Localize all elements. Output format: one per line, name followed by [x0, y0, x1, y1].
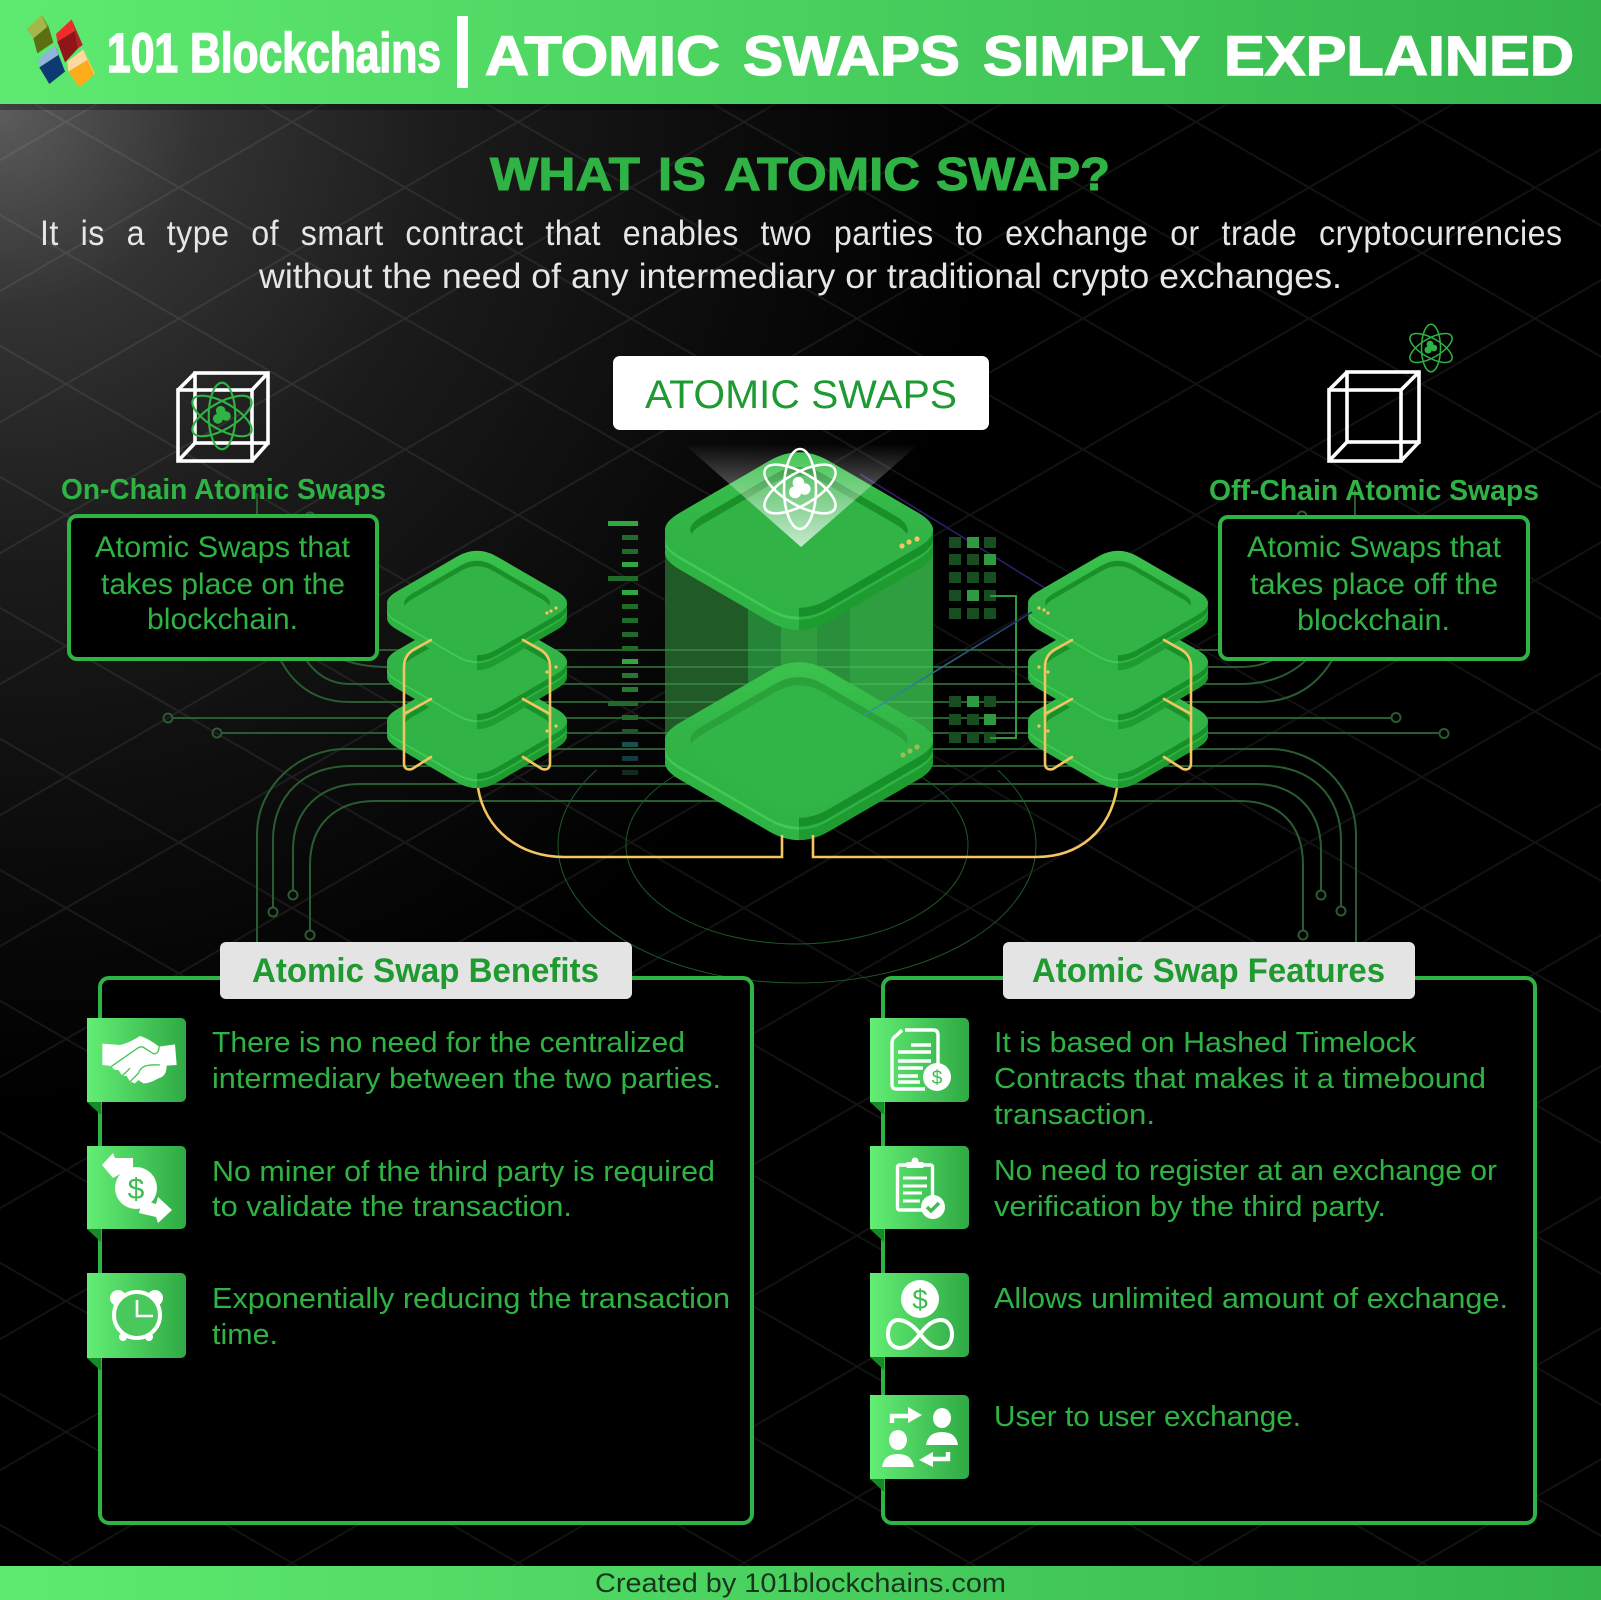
description second line: without the need of any intermediary or traditional crypto exchanges. [258, 257, 1342, 296]
icon: empty cube with atom outside [1329, 324, 1456, 461]
circuit lines [164, 490, 1448, 945]
feature text 1: transaction. [994, 1099, 1155, 1131]
icon: contract document tile: $ [932, 1068, 943, 1089]
purple accent line [860, 474, 1045, 588]
icon: atom over central server [757, 449, 843, 529]
feature text 2 [994, 1155, 1497, 1223]
icon: alarm clock tile [87, 1273, 186, 1371]
central server [665, 452, 933, 840]
light beam [684, 444, 919, 547]
feature text 4: User to user exchange. [994, 1401, 1301, 1433]
title: SIMPLY [983, 24, 1200, 87]
heading: what is atomic swap: ATOMIC [724, 148, 920, 200]
feature text 3: Allows unlimited amount of exchange. [994, 1283, 1508, 1315]
panel: off-chain description: takes place off the [1250, 568, 1498, 601]
heading pill: benefits [220, 942, 632, 999]
label box: atomic swaps: ATOMIC SWAPS [645, 373, 957, 417]
title: EXPLAINED [1224, 24, 1574, 87]
title: ATOMIC [485, 24, 720, 87]
benefit text 3: time. [212, 1319, 278, 1351]
header banner [0, 0, 1601, 104]
title: SWAPS [743, 24, 960, 87]
heading: what is atomic swap: SWAP? [936, 148, 1110, 200]
benefit text 3: Exponentially reducing the transaction [212, 1283, 730, 1315]
icon: handshake tile [87, 1018, 186, 1115]
translucent column between server slabs [665, 548, 933, 763]
panel: atomic swap features [870, 942, 1535, 1523]
feature text 1 [994, 1027, 1486, 1131]
yellow connectors to central server [478, 788, 1117, 857]
concentric ellipses [558, 770, 1036, 984]
panel: off-chain description: blockchain. [1297, 604, 1450, 637]
panel: off-chain description: Atomic Swaps that [1247, 531, 1502, 564]
benefit text 2: to validate the transaction. [212, 1191, 572, 1223]
description first line: It is a type of smart contract that enables two parties to exchange or trade cryptocurrencies [40, 214, 1563, 253]
feature text 1: It is based on Hashed Timelock [994, 1027, 1417, 1059]
icon: dollar arrows tile [87, 1146, 186, 1242]
blue accent line [864, 612, 1032, 715]
left server stack [387, 551, 567, 788]
benefit text 1: There is no need for the centralized [212, 1027, 685, 1059]
icon: user to user tile [870, 1395, 969, 1492]
panel: on-chain description: Atomic Swaps that [95, 531, 351, 564]
benefit text 1: intermediary between the two parties. [212, 1063, 721, 1095]
off-chain label: Off-Chain Atomic Swaps [1209, 475, 1539, 507]
panel: on-chain description: blockchain. [147, 603, 298, 636]
title [485, 24, 1574, 87]
footer: Created by 101blockchains.com [595, 1568, 1006, 1598]
right server stack [1028, 551, 1208, 788]
icon: cube with atom inside [178, 373, 268, 461]
feature text 2: verification by the third party. [994, 1191, 1386, 1223]
panel: on-chain description [69, 516, 377, 659]
benefit text 2 [212, 1156, 715, 1223]
icon: clipboard check tile [870, 1146, 969, 1242]
panel: atomic swap benefits [87, 942, 752, 1523]
feature text 1: Contracts that makes it a timebound [994, 1063, 1486, 1095]
heading pill: benefits: Atomic Swap Benefits [252, 952, 599, 990]
logo wordmark: 101 Blockchains [107, 21, 441, 84]
panel: on-chain description: takes place on the [101, 568, 345, 601]
label box: atomic swaps [613, 356, 989, 430]
icon: dollar infinity tile [870, 1273, 969, 1370]
heading: what is atomic swap: IS [658, 148, 706, 200]
benefit text 2: No miner of the third party is required [212, 1156, 715, 1188]
benefit text 1 [212, 1027, 721, 1095]
benefit text 3 [212, 1283, 730, 1351]
on-chain label: On-Chain Atomic Swaps [61, 474, 386, 506]
ladder bars [608, 521, 638, 775]
heading pill: features [1003, 942, 1415, 999]
icon: contract document tile [870, 1018, 969, 1115]
heading: what is atomic swap: WHAT [490, 148, 640, 200]
pixel squares [949, 537, 1016, 743]
feature text 2: No need to register at an exchange or [994, 1155, 1497, 1187]
heading: what is atomic swap [490, 148, 1110, 200]
icon: dollar arrows tile: $ [128, 1173, 145, 1206]
footer [0, 1566, 1601, 1600]
panel: off-chain description [1220, 517, 1528, 659]
icon: 101 Blockchains logo cubes [27, 15, 95, 87]
icon: dollar infinity tile: $ [912, 1284, 928, 1315]
heading pill: features: Atomic Swap Features [1032, 952, 1385, 990]
